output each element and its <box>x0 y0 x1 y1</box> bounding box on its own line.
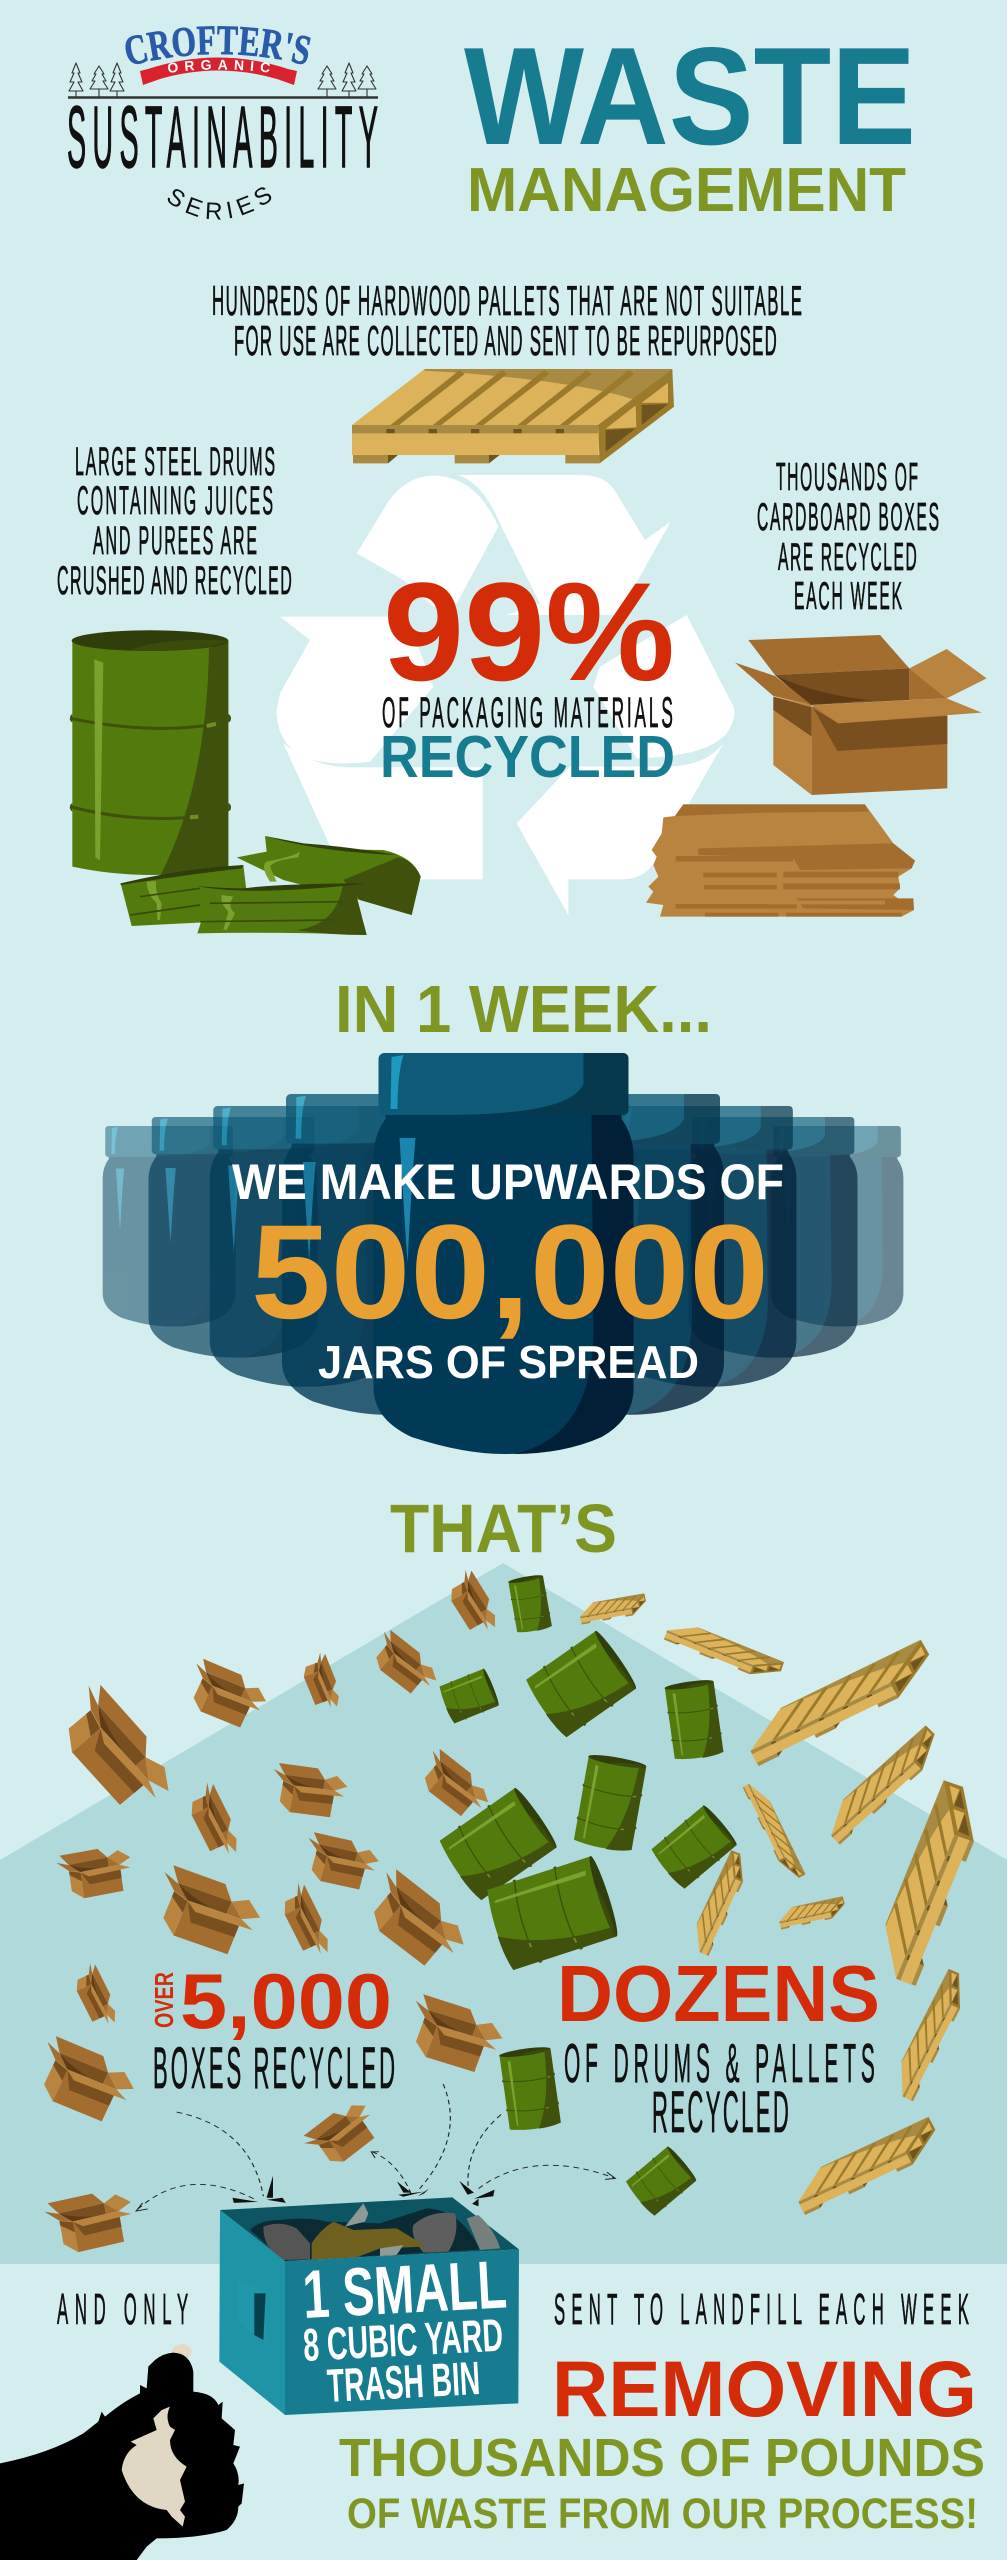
conclusion: REMOVING <box>552 2344 977 2433</box>
icon: box <box>300 2096 385 2174</box>
icon: box <box>411 1745 495 1825</box>
icon: box <box>179 1656 272 1735</box>
icon: drum <box>483 1854 622 1973</box>
icon: box <box>275 1880 335 1962</box>
icon: bear paw thumbs up <box>0 2344 244 2560</box>
falling pallets <box>578 1593 991 2215</box>
stat: over 5,000 boxes: 5,000 <box>180 1957 392 2045</box>
icon: drum <box>649 1803 739 1891</box>
icon: drum <box>523 1628 640 1740</box>
text: and only: AND ONLY <box>57 2286 188 2335</box>
text: sent to landfill: SENT TO LANDFILL EACH WEEK <box>554 2286 969 2335</box>
icon: drum <box>498 2045 562 2133</box>
stat: over 5,000 boxes: OVER <box>149 1972 179 2028</box>
icon: box <box>68 1961 122 2031</box>
text: drums: CONTAINING JUICES <box>77 479 273 523</box>
icon: box <box>267 1761 350 1821</box>
icon: pallet <box>789 2116 945 2215</box>
icon: box <box>298 1651 344 1714</box>
icon: box <box>399 1991 508 2079</box>
icon: box <box>182 1780 244 1863</box>
icon: drum <box>624 2145 698 2218</box>
icon: crushed drums <box>121 836 421 935</box>
icon: drum <box>572 1752 648 1854</box>
heading: that's: THAT’S <box>390 1490 617 1567</box>
icon: box <box>298 1830 382 1894</box>
icon: pallet <box>739 1639 940 1766</box>
icon: box <box>55 1845 135 1901</box>
stat: 500,000 jars <box>232 1154 784 1388</box>
stat: 99 percent: 99% <box>383 553 675 710</box>
series name: SUSTAINABILITY <box>67 88 378 186</box>
icon: row of jars <box>103 1053 903 1454</box>
falling drums <box>436 1574 739 2218</box>
text: boxes <box>757 456 939 618</box>
stat: over 5,000 boxes: BOXES RECYCLED <box>153 2036 395 2101</box>
text: pallets <box>212 277 802 364</box>
text: boxes: ARE RECYCLED <box>778 536 917 579</box>
icon: box <box>43 2187 138 2257</box>
text: boxes: THOUSANDS OF <box>776 456 918 499</box>
icon: drum <box>437 1667 501 1725</box>
icon: recycling symbol <box>277 475 734 927</box>
icon: pallet <box>687 1850 753 1956</box>
icon: pallet <box>578 1593 648 1625</box>
icon: steel drum <box>70 630 231 876</box>
bin contents <box>250 2203 500 2261</box>
stat: dozens of drums and pallets: OF DRUMS & PALLETS <box>564 2032 875 2094</box>
icon: pallet <box>664 1617 785 1685</box>
icon: box <box>442 1567 503 1639</box>
icon: pallet <box>888 1968 974 2102</box>
dashed arrows into bin <box>136 2084 615 2211</box>
stat: over 5,000 boxes <box>149 1957 395 2101</box>
icon: drum <box>664 1678 725 1762</box>
bin label: TRASH BIN <box>326 2351 481 2412</box>
stat: 500,000 jars: JARS OF SPREAD <box>318 1336 699 1388</box>
icon: pallet <box>777 1896 847 1930</box>
series label: SERIES <box>168 187 272 220</box>
bin label: 8 CUBIC YARD <box>302 2309 504 2371</box>
conclusion <box>339 2344 985 2538</box>
icon: pallet <box>352 369 674 463</box>
text: pallets: FOR USE ARE COLLECTED AND SENT TO BE REPURPOSED <box>234 317 777 364</box>
icon: tree row <box>68 63 378 98</box>
logo: Crofter's Sustainability Series <box>67 26 378 220</box>
icon: pallet <box>743 1779 806 1883</box>
icon: drum <box>507 1574 553 1634</box>
conclusion: THOUSANDS OF POUNDS <box>339 2428 985 2488</box>
icon: flattened cardboard stack <box>646 804 915 917</box>
stat: dozens of drums and pallets <box>557 1949 880 2145</box>
text: drums: LARGE STEEL DRUMS <box>75 440 275 484</box>
text: drums <box>57 440 292 603</box>
icon: drum <box>436 1785 560 1903</box>
stat: 99 percent: OF PACKAGING MATERIALS <box>382 688 673 736</box>
stat: 500,000 jars: WE MAKE UPWARDS OF <box>232 1154 784 1210</box>
text: drums: CRUSHED AND RECYCLED <box>57 559 292 603</box>
icon: box <box>46 1678 182 1823</box>
stat: 99 percent <box>380 553 675 790</box>
bin label: 1 SMALL <box>301 2246 509 2333</box>
icon: box <box>354 1864 474 1978</box>
title: MANAGEMENT <box>467 156 906 225</box>
icon: pallet <box>819 1725 947 1845</box>
logo ribbon <box>140 58 297 85</box>
background mountain shape <box>0 1563 1007 2264</box>
icon: trash bin <box>219 2197 519 2415</box>
title: WASTE <box>464 19 916 174</box>
text: boxes: EACH WEEK <box>794 575 902 618</box>
text: pallets: HUNDREDS OF HARDWOOD PALLETS THAT ARE NOT SUITABLE <box>212 277 802 324</box>
stat: dozens of drums and pallets: RECYCLED <box>652 2080 789 2145</box>
stat: 99 percent: RECYCLED <box>380 724 675 790</box>
icon: cardboard box <box>735 635 987 795</box>
icon: pallet <box>868 1779 991 1986</box>
icon: box <box>144 1861 267 1963</box>
brand name: CROFTER'S <box>125 26 311 64</box>
icon: box <box>26 2032 141 2130</box>
text: drums: AND PUREES ARE <box>93 519 257 563</box>
text: boxes: CARDBOARD BOXES <box>757 496 939 539</box>
icon: box <box>363 1626 443 1702</box>
stat: 500,000 jars: 500,000 <box>251 1198 769 1347</box>
heading: in 1 week: IN 1 WEEK... <box>335 972 712 1047</box>
bin label <box>301 2246 509 2412</box>
stat: dozens of drums and pallets: DOZENS <box>557 1949 880 2038</box>
brand sub name: ORGANIC <box>168 60 270 72</box>
falling boxes <box>26 1567 508 2257</box>
